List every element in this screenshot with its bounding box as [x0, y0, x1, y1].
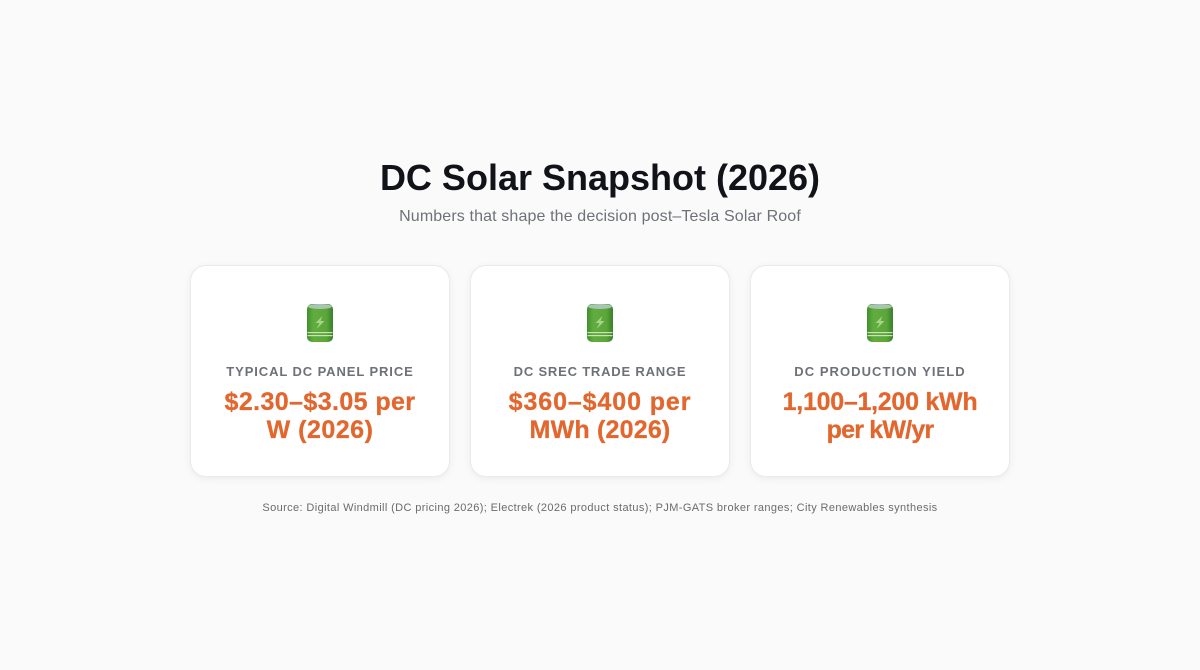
label: DC PRODUCTION YIELD: [794, 364, 966, 379]
icon: battery: [587, 304, 613, 342]
panel: DC SREC trade range: [470, 265, 730, 477]
label: DC SREC TRADE RANGE: [514, 364, 686, 379]
value: $2.30–$3.05 per: [225, 388, 415, 416]
value: MWh (2026): [530, 416, 670, 444]
title: DC Solar Snapshot (2026): [380, 157, 820, 198]
value: 1,100–1,200 kWh: [783, 388, 977, 416]
value: [783, 388, 977, 444]
source note: Source: Digital Windmill (DC pricing 2026); Electrek (2026 product status); PJM-GATS broker ranges; City Renewables synthesis: [262, 502, 938, 514]
value: [224, 388, 415, 444]
panel: typical DC panel price: [190, 265, 450, 477]
icon: battery: [307, 304, 333, 342]
subtitle: Numbers that shape the decision post–Tesla Solar Roof: [399, 208, 801, 225]
icon: battery: [867, 304, 893, 342]
panel: DC production yield: [750, 265, 1010, 477]
label: TYPICAL DC PANEL PRICE: [226, 364, 414, 379]
value: [508, 388, 691, 444]
value: W (2026): [267, 416, 373, 444]
value: per kW/yr: [827, 416, 933, 444]
value: $360–$400 per: [509, 388, 691, 416]
